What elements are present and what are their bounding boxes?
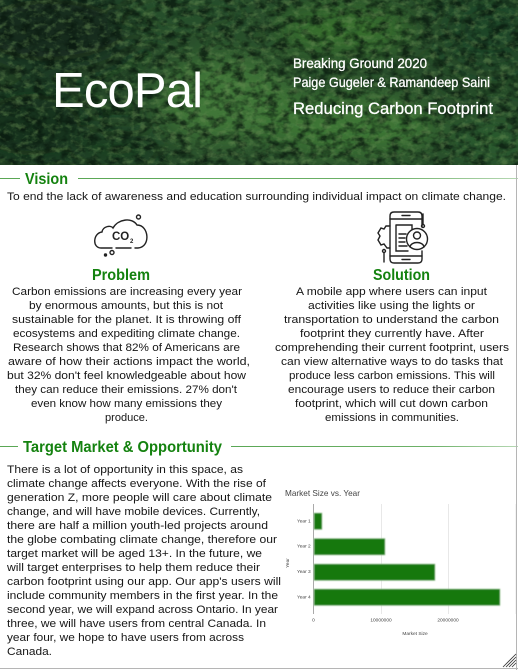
heading: Vision: Vision: [25, 171, 68, 188]
heading: Target Market & Opportunity: Target Market & Opportunity: [23, 439, 222, 456]
text block: problem: Research shows that 82% of Americans are: [13, 342, 240, 354]
header details: Breaking Ground 2020: [293, 55, 427, 71]
text block: target market: there are half a million youth-led projects around: [7, 520, 268, 532]
chart title: Market Size vs. Year: [285, 488, 360, 498]
text block: solution: transportation to understand the carbon: [284, 314, 499, 326]
text block: target market: three, we will have users from central Canada. In: [7, 618, 266, 630]
bars: [314, 513, 500, 606]
text block: target market: [6, 464, 281, 658]
vision statement: To end the lack of awareness and education surrounding individual impact on climate change.: [7, 191, 506, 203]
header banner: forest photo: [0, 0, 518, 170]
text block: target market: target market will be aged 13+. In the future, we: [7, 548, 262, 560]
axis labels: Year 3: [297, 569, 311, 575]
bar chart: market size vs year: [285, 488, 516, 637]
text block: solution: emissions in communities.: [325, 412, 459, 424]
text block: target market: climate change affects everyone. With the rise of: [7, 478, 267, 490]
text block: solution: footprint they currently have. After: [300, 328, 484, 340]
text block: solution: encourage users to reduce their carbon: [288, 384, 495, 396]
icon: CO2 cloud: CO: [112, 231, 129, 243]
axis labels: Year 2: [297, 544, 311, 550]
axis labels: [285, 518, 459, 637]
axis labels: Market Size: [402, 631, 428, 637]
heading: Solution: Solution: [373, 267, 430, 284]
text block: problem: produce.: [105, 412, 148, 424]
text block: solution: [275, 286, 509, 424]
text block: problem: sustainable for the planet. It is throwing off: [12, 314, 242, 326]
text block: solution: produce less carbon emissions. This will: [289, 370, 495, 382]
icon: phone with user: [378, 212, 428, 263]
text block: target market: carbon footprint using our app. Our app's users will: [7, 576, 281, 588]
text block: problem: they can reduce their emissions. 27% don't: [15, 384, 238, 396]
header details: Paige Gugeler & Ramandeep Saini: [293, 74, 490, 90]
icon: CO2 cloud: [95, 215, 147, 256]
axis labels: Year 1: [297, 518, 311, 524]
text block: problem: by enormous amounts, but this is not: [29, 300, 224, 312]
text block: target market: second year, we will expand across Ontario. In year: [7, 604, 278, 616]
text block: solution: footprint, which will cut down carbon: [295, 398, 488, 410]
page frame and resize handle: [0, 165, 518, 670]
text block: target market: the globe combating climate change, therefore our: [7, 534, 277, 546]
icon: CO2 cloud: 2: [130, 239, 134, 245]
text block: target market: generation Z, more people will care about climate: [7, 492, 272, 504]
text block: solution: activities like using the lights or: [308, 300, 475, 312]
text block: problem: ecosystems and expediting climate change.: [13, 328, 240, 340]
text block: solution: can view alternative ways to do tasks that: [281, 356, 504, 368]
text block: target market: Canada.: [7, 646, 52, 658]
text block: target market: will target enterprises to help them reduce their: [6, 562, 260, 574]
text block: problem: aware of how their actions impact the world,: [8, 356, 250, 368]
text block: problem: [7, 286, 250, 424]
heading: Problem: Problem: [92, 267, 150, 284]
title: EcoPal: EcoPal: [52, 64, 203, 118]
text block: target market: There is a lot of opportunity in this space, as: [7, 464, 243, 476]
text block: target market: include community members in the first year. In the: [7, 590, 278, 602]
axis labels: 10000000: [370, 618, 392, 624]
axis labels: 0: [312, 618, 315, 624]
text block: target market: change, and will have mobile devices. Currently,: [7, 506, 260, 518]
axis labels: 20000000: [437, 618, 459, 624]
text block: solution: A mobile app where users can input: [296, 286, 488, 298]
text block: solution: comprehending their current footprint, users: [275, 342, 509, 354]
text block: problem: even know how many emissions they: [31, 398, 222, 410]
text block: problem: Carbon emissions are increasing every year: [12, 286, 242, 298]
axis labels: Year 4: [297, 594, 311, 600]
header details: [293, 55, 493, 118]
axis labels: Year: [285, 558, 291, 568]
header details: Reducing Carbon Footprint: [293, 99, 493, 118]
text block: target market: year four, we hope to have users from across: [7, 632, 244, 644]
text block: problem: but 32% don't feel knowledgeable about how: [7, 370, 247, 382]
